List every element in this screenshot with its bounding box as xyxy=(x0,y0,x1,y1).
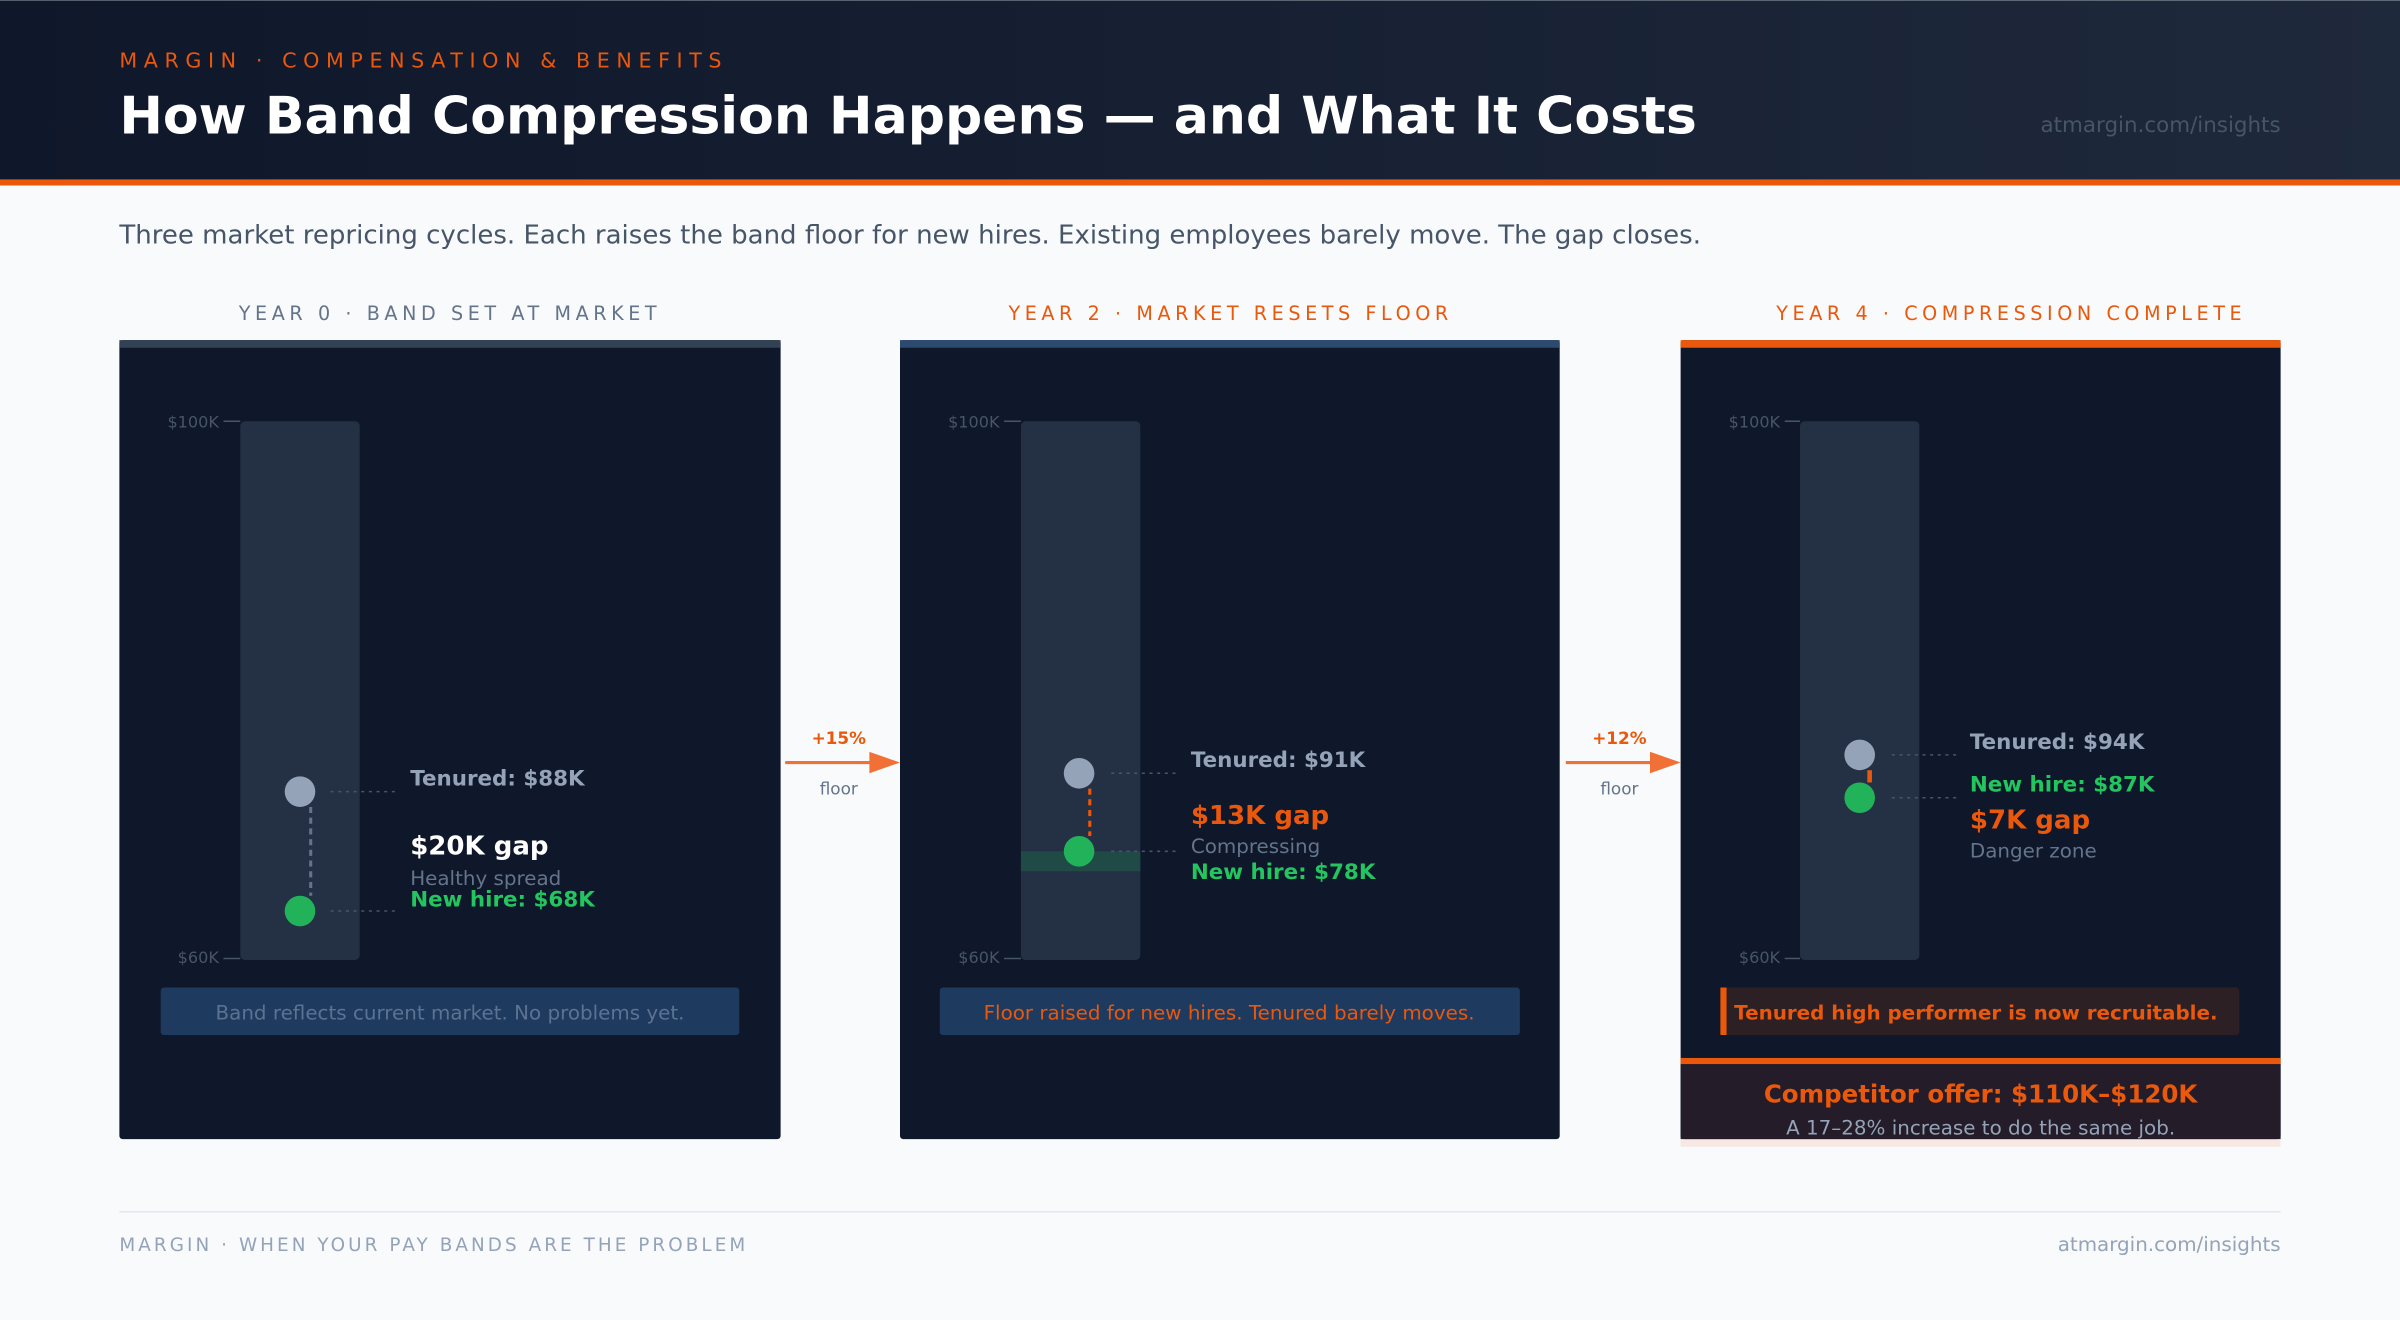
panel: year 4 xyxy=(1681,302,2281,1147)
subtitle: Three market repricing cycles. Each raises the band floor for new hires. Existing employees barely move. The gap closes. xyxy=(118,221,1701,251)
panel: year 4: New hire: $87K xyxy=(1970,773,2156,798)
kicker: MARGIN · COMPENSATION & BENEFITS xyxy=(119,49,728,73)
panel: year 4: $7K gap xyxy=(1970,805,2090,835)
panel: year 4: $60K xyxy=(1739,948,1781,967)
callout xyxy=(1720,988,2239,1035)
note xyxy=(161,988,739,1035)
footer xyxy=(119,1211,2281,1256)
title: How Band Compression Happens — and What It Costs xyxy=(119,86,1697,146)
arrow 2: floor xyxy=(1600,779,1639,799)
panel: year 0: YEAR 0 · BAND SET AT MARKET xyxy=(238,302,661,325)
panel: year 0: Healthy spread xyxy=(410,867,561,890)
competitor offer xyxy=(1681,1064,2281,1139)
footer: MARGIN · WHEN YOUR PAY BANDS ARE THE PROBLEM xyxy=(119,1235,748,1256)
panel: year 2: $100K xyxy=(948,412,1000,431)
panel: year 4: Tenured high performer is now recruitable. xyxy=(1734,1002,2218,1025)
arrow 1: +15% xyxy=(812,728,866,748)
panel: year 2: $60K xyxy=(958,948,1000,967)
arrow 2: +12% xyxy=(1592,728,1647,748)
arrow 2 xyxy=(1566,728,1681,799)
panel: year 4: Tenured: $94K xyxy=(1970,730,2146,755)
panel: year 0: $100K xyxy=(167,412,219,431)
panel: year 2: Floor raised for new hires. Tenured barely moves. xyxy=(984,1002,1475,1025)
arrow 1 xyxy=(785,728,900,799)
panel: year 0: Band reflects current market. No problems yet. xyxy=(216,1002,684,1025)
panel: year 0: New hire: $68K xyxy=(410,887,596,912)
panel: year 4: Danger zone xyxy=(1970,839,2097,862)
panel: year 0: $60K xyxy=(178,948,219,967)
panel: year 0: $20K gap xyxy=(410,831,549,861)
panel: year 2: New hire: $78K xyxy=(1191,860,1377,885)
footer: atmargin.com/insights xyxy=(2058,1233,2281,1256)
band bar xyxy=(240,421,360,960)
arrow 1: floor xyxy=(820,779,858,799)
panel: year 0: Tenured: $88K xyxy=(410,767,586,792)
panel: year 2: Tenured: $91K xyxy=(1191,748,1367,773)
panel: year 2: Compressing xyxy=(1191,835,1320,858)
panel: year 0 xyxy=(119,302,781,1139)
panel: year 2 xyxy=(900,302,1560,1139)
panel: year 4: $100K xyxy=(1729,412,1781,431)
header url: atmargin.com/insights xyxy=(2041,113,2281,138)
panel: year 4: YEAR 4 · COMPRESSION COMPLETE xyxy=(1775,302,2246,325)
dot tenured xyxy=(285,776,315,807)
header xyxy=(0,0,2400,186)
dot new hire xyxy=(285,896,315,926)
floor stripe xyxy=(1021,851,1140,871)
panel: year 2: $13K gap xyxy=(1191,801,1329,831)
panel: year 4: A 17–28% increase to do the same job. xyxy=(1786,1116,2175,1139)
panel: year 4: Competitor offer: $110K–$120K xyxy=(1764,1079,2198,1108)
panel: year 2: YEAR 2 · MARKET RESETS FLOOR xyxy=(1007,302,1453,325)
